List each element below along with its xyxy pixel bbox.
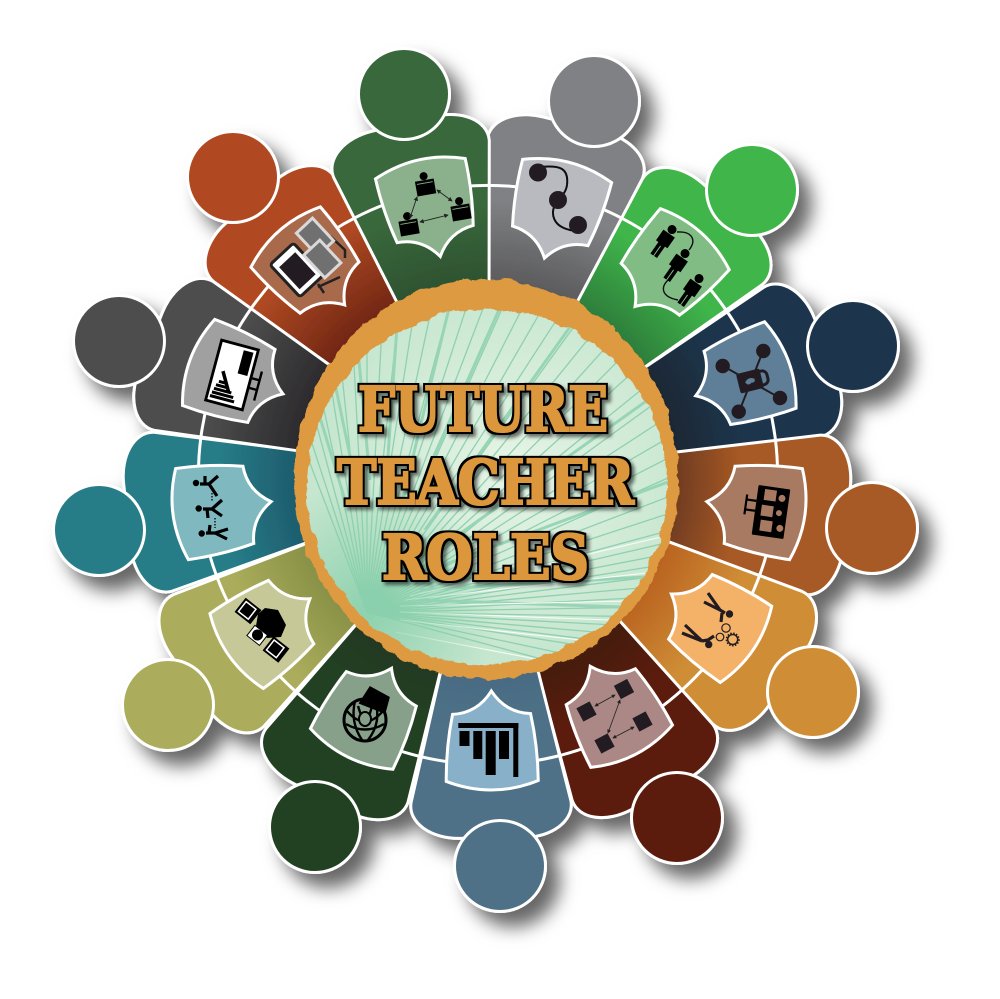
brown head <box>826 482 918 574</box>
dark gray connector <box>193 303 253 437</box>
center disc with radiating lines <box>306 308 668 666</box>
bright green head <box>706 144 798 236</box>
blue-gray shield <box>445 691 538 790</box>
rust connector <box>246 210 357 308</box>
dark gray head <box>74 296 164 386</box>
orange connector <box>682 574 767 695</box>
brown connector <box>759 439 784 579</box>
icon: three people on a cable <box>648 222 707 309</box>
title line: Roles: ROLES <box>382 521 589 594</box>
person: forest green (three desks) <box>325 48 523 320</box>
blue-gray connector <box>421 755 562 765</box>
icon: three people at desks with arrows <box>397 171 472 237</box>
dark green head <box>270 782 360 872</box>
icon: globe with laptop <box>344 687 389 741</box>
orange head <box>768 646 858 738</box>
forest green connector <box>353 177 491 218</box>
icon: board with three students <box>742 484 790 539</box>
center badge <box>294 278 680 681</box>
rust head <box>188 132 278 222</box>
gray shield <box>500 151 614 270</box>
icon: display with stacked bars <box>206 340 267 412</box>
dark gray shield <box>174 316 299 437</box>
teal shield <box>167 456 278 561</box>
teal head <box>54 484 144 576</box>
person: rust (tablet and documents) <box>188 132 430 392</box>
forest green shield <box>373 150 485 267</box>
title <box>337 373 634 594</box>
teal connector <box>192 436 216 576</box>
icon: hanging bar chart <box>458 723 518 777</box>
icon: table with two monitors and a chair <box>235 598 289 663</box>
maroon head <box>632 772 722 864</box>
olive connector <box>210 576 296 697</box>
dark green body <box>249 599 475 834</box>
person: blue-gray (bar chart) <box>409 655 572 912</box>
person: olive (desk with monitors) <box>122 512 384 750</box>
dark gray body <box>121 268 349 484</box>
person: dark gray (screen with stairs) <box>74 268 349 484</box>
brown shield <box>700 456 811 561</box>
person: dark green (globe and laptop) <box>249 599 475 872</box>
icon: three stick figures with dotted path <box>193 476 228 539</box>
person: orange (swimmers and gears) <box>592 510 858 745</box>
orange body <box>592 510 832 745</box>
rust shield <box>245 200 379 335</box>
rust body <box>190 150 430 392</box>
person: teal (moving figures) <box>54 416 317 596</box>
person: navy (network with lock) <box>627 274 898 488</box>
navy shield <box>680 319 804 439</box>
icon: tablet with papers <box>270 216 345 297</box>
blue-gray body <box>409 655 572 839</box>
person: maroon (connected squares) <box>502 596 730 864</box>
gray body <box>452 105 651 320</box>
bright green shield <box>601 202 735 337</box>
maroon connector <box>561 689 688 763</box>
olive head <box>122 660 214 750</box>
olive shield <box>203 561 337 694</box>
title line: Teacher: TEACHER <box>337 446 634 519</box>
gray connector <box>487 177 625 219</box>
blue-gray head <box>454 820 546 912</box>
circular infographic of thirteen people around the title <box>54 48 918 912</box>
rough orange ring <box>294 279 679 679</box>
person: bright green (linked learners) <box>546 144 798 394</box>
navy connector <box>727 308 784 442</box>
icon: linked nodes <box>529 164 587 234</box>
navy body <box>627 274 854 488</box>
person: brown (classroom seating) <box>656 418 918 599</box>
bright green connector <box>621 211 732 311</box>
maroon shield <box>549 645 677 775</box>
maroon body <box>502 596 730 832</box>
orange shield <box>646 556 779 688</box>
icon: four squares with arrows <box>576 679 653 754</box>
dark green shield <box>306 648 433 777</box>
gray head <box>548 56 640 146</box>
forest green head <box>358 48 450 140</box>
title line: Future: FUTURE <box>358 373 608 446</box>
navy head <box>808 300 898 392</box>
icon: two figures and gears <box>682 593 739 648</box>
bright green body <box>546 151 787 394</box>
forest green body <box>325 105 523 320</box>
dark green connector <box>293 692 421 764</box>
icon: network with padlock <box>716 344 787 419</box>
brown body <box>656 418 856 599</box>
olive body <box>143 512 384 747</box>
person: gray (connected path) <box>452 56 651 320</box>
teal body <box>118 416 317 596</box>
